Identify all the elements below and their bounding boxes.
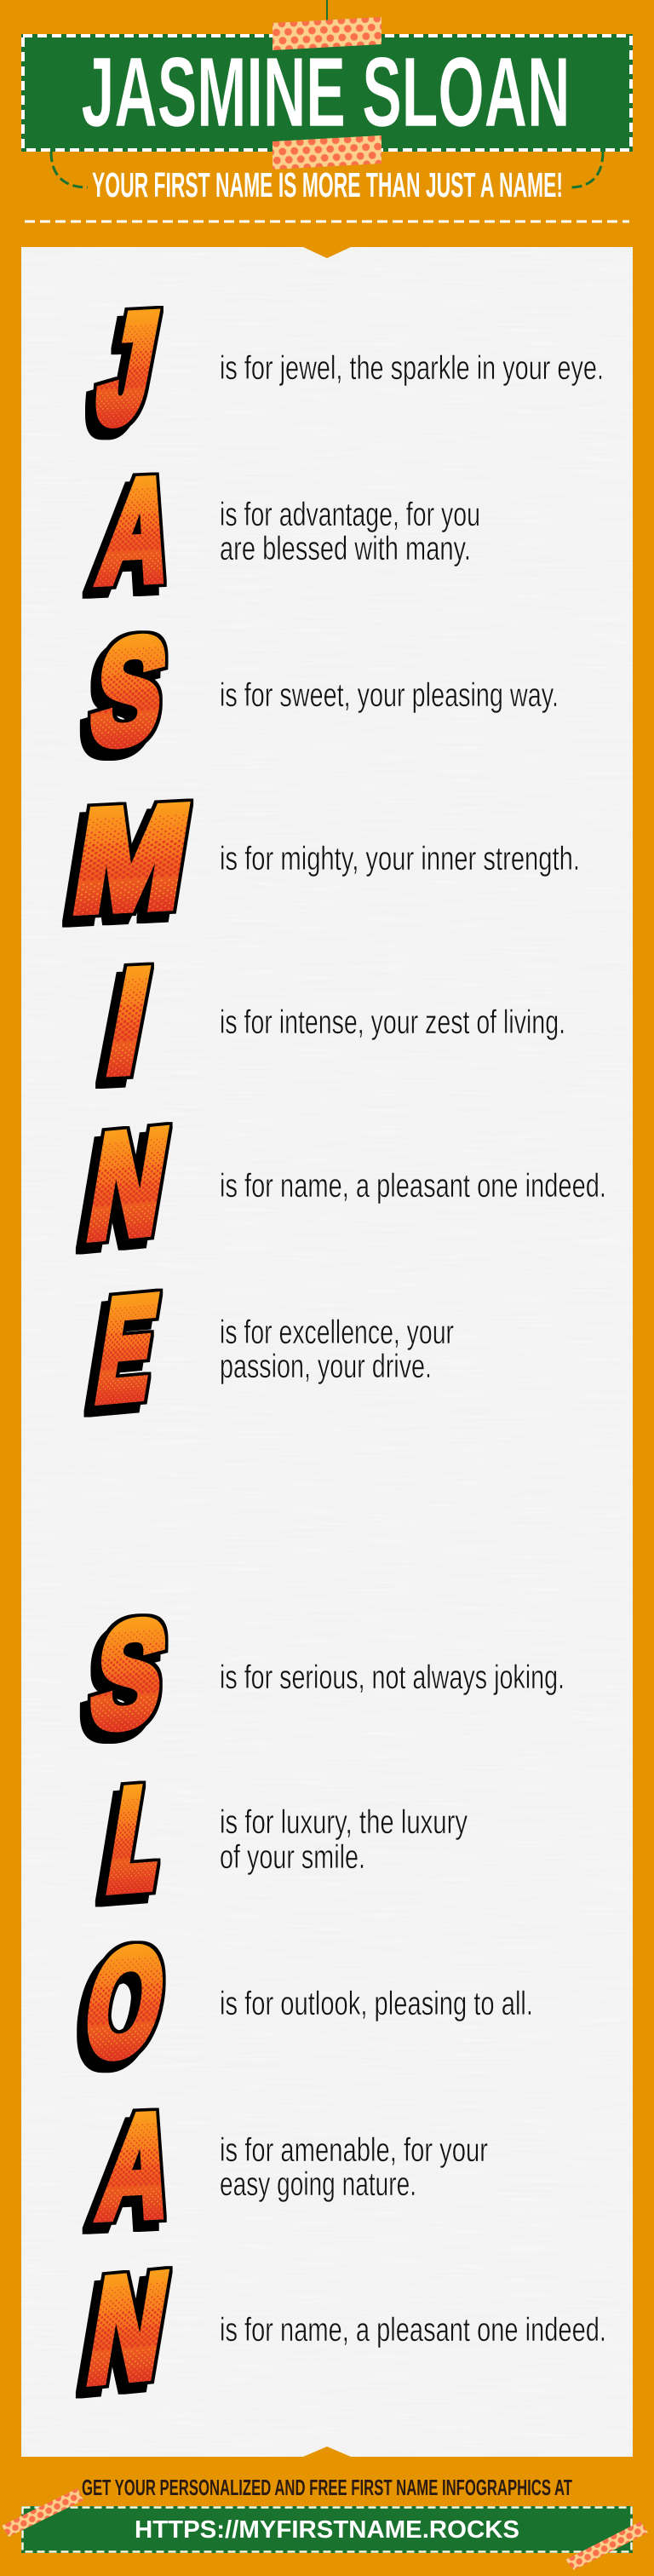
footer url: HTTPS://MYFIRSTNAME.ROCKS bbox=[135, 2516, 519, 2544]
letter I: I bbox=[98, 939, 160, 1103]
text: A: is for advantage, for you bbox=[220, 497, 480, 533]
text: A (surname) bbox=[220, 2132, 488, 2203]
hanging line bbox=[326, 0, 328, 22]
letter E: E bbox=[88, 1266, 166, 1432]
text: O: is for outlook, pleasing to all. bbox=[220, 1986, 533, 2022]
text: E bbox=[220, 1314, 454, 1385]
text: A bbox=[220, 497, 480, 567]
tape: footer right bbox=[565, 2521, 648, 2570]
tape: bottom bbox=[272, 135, 382, 170]
letter S: S bbox=[82, 606, 177, 776]
letter J: J bbox=[89, 286, 166, 452]
letter L: L bbox=[101, 1760, 172, 1918]
text: A: are blessed with many. bbox=[220, 531, 471, 567]
text: L: is for luxury, the luxury bbox=[220, 1804, 468, 1841]
bracket: left bbox=[51, 152, 88, 187]
letter N (surname): N bbox=[78, 2241, 177, 2414]
text: L: of your smile. bbox=[220, 1839, 365, 1876]
letter A: A bbox=[91, 449, 183, 613]
text: E: is for excellence, your bbox=[220, 1314, 454, 1351]
letter A (surname): A bbox=[91, 2084, 183, 2249]
text: E: passion, your drive. bbox=[220, 1348, 432, 1385]
letter M: M bbox=[65, 776, 198, 942]
letter S (surname): S bbox=[82, 1589, 177, 1759]
text: A (surname): is for amenable, for your bbox=[220, 2132, 488, 2169]
tape: footer left bbox=[2, 2488, 83, 2537]
letter O: O bbox=[74, 1915, 176, 2090]
footer banner bbox=[21, 2506, 633, 2553]
tape: top bbox=[272, 17, 382, 50]
text: L bbox=[220, 1804, 468, 1876]
letter N: N bbox=[78, 1097, 177, 1270]
bracket: right bbox=[570, 152, 603, 187]
title banner bbox=[21, 34, 633, 152]
text: A (surname): easy going nature. bbox=[220, 2166, 416, 2203]
